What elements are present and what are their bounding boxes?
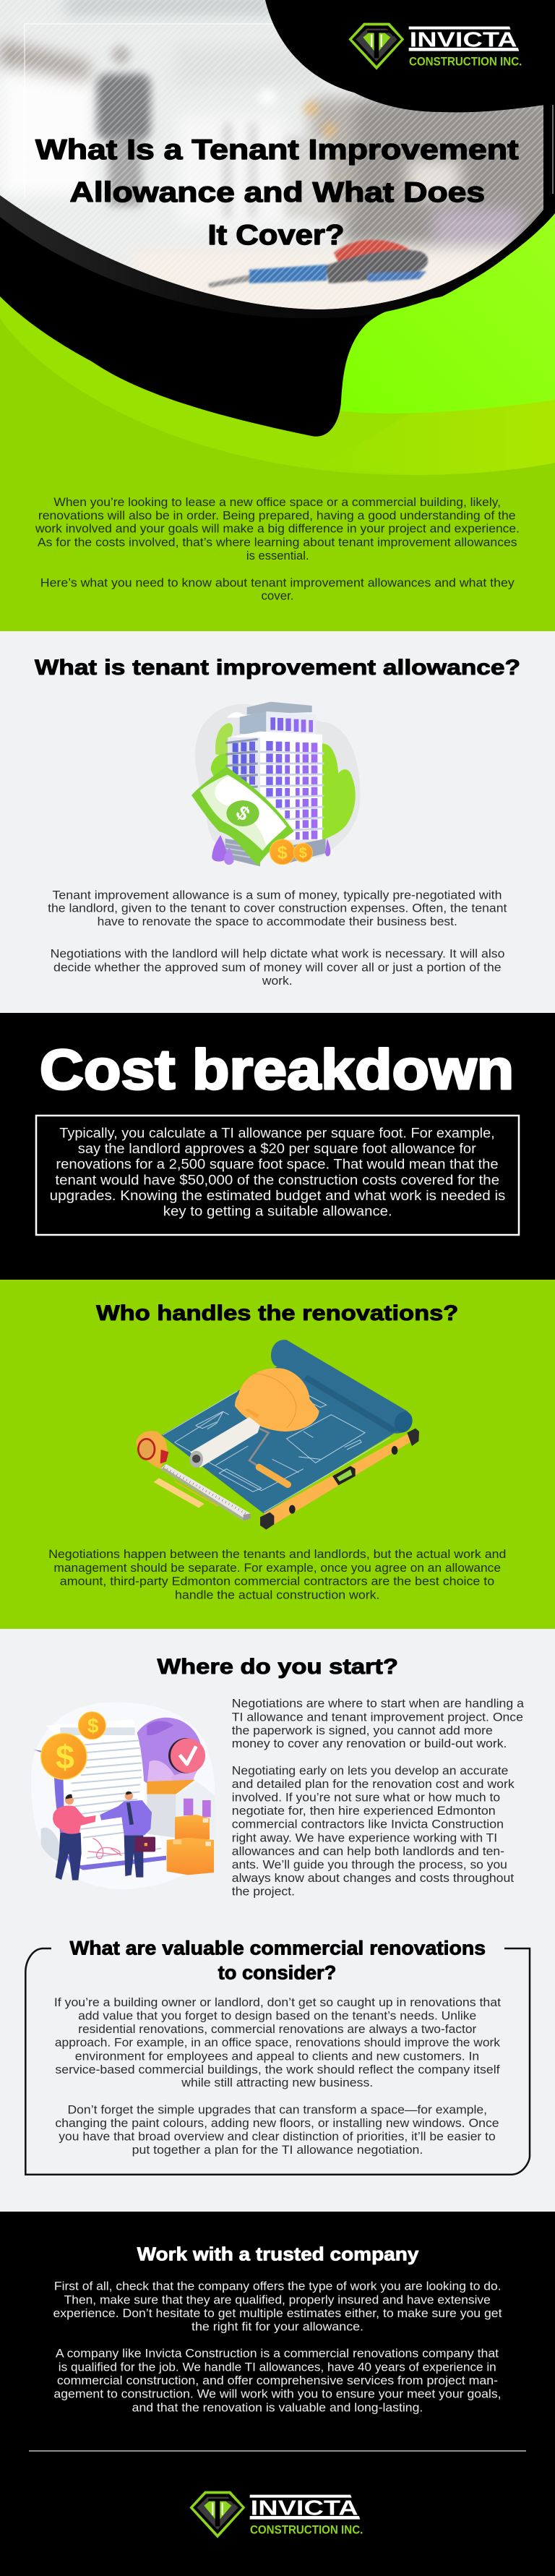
body text: you have that broad overview and clear distinction of priorities, it’ll be easier to — [59, 2131, 496, 2144]
frame — [25, 1948, 530, 2175]
body text: First of all, check that the company offers the type of work you are looking to do. — [54, 2280, 502, 2293]
callout box: renovations for a 2,500 square foot space. That would mean that the — [56, 1158, 499, 1173]
logo: Invicta Construction footer: INVICTA — [251, 2496, 358, 2520]
intro text: As for the costs involved, that’s where learning about tenant improvement allowances — [38, 536, 517, 549]
body text: the landlord, given to the tenant to cover construction expenses. Often, the tenant — [48, 902, 507, 915]
body text: while still attracting new business. — [181, 2076, 373, 2089]
body text: have to renovate the space to accommodate their business best. — [98, 915, 457, 928]
icon: large coin — [41, 1734, 87, 1779]
icon: coins: $ — [299, 846, 307, 862]
person: left — [53, 1794, 96, 1880]
illustration: signing a lease — [31, 1702, 215, 1889]
panel: hero — [0, 0, 555, 631]
hatch overlay — [0, 0, 555, 318]
body text column: the project. — [232, 1886, 295, 1899]
logo: Invicta Construction — [348, 23, 522, 70]
panel: work with a trusted company — [0, 2212, 555, 2576]
panel: what is tenant improvement allowance — [0, 631, 555, 1013]
body text column: TI allowance and tenant improvement project. Once — [232, 1711, 523, 1724]
intro text — [35, 496, 520, 602]
body text column: commercial contractors like Invicta Construction — [232, 1818, 504, 1831]
bright green wave — [340, 210, 555, 414]
heading: to consider? — [218, 1961, 336, 1983]
panel: valuable commercial renovations — [25, 1937, 530, 2175]
callout box: say the landlord approves a $20 per square foot allowance for — [78, 1142, 477, 1157]
body text column: right away. We have experience working with TI — [232, 1831, 497, 1844]
title: What Is a Tenant Improvement — [35, 134, 519, 166]
body text column: negotiate for, then hire experienced Edmonton — [232, 1805, 496, 1818]
body text: Then, make sure that they are qualified, properly insured and have extensive — [64, 2293, 491, 2306]
panel: cost breakdown — [0, 1013, 555, 1280]
body text column: allowances and can help both landlords and ten- — [232, 1845, 504, 1858]
icon: banknote: $ — [232, 801, 254, 825]
body text column: Negotiating early on lets you develop an accurate — [232, 1764, 508, 1777]
icon: paint roller — [189, 1417, 288, 1484]
icon: small coin: $ — [87, 1715, 99, 1737]
body text: changing the paint colours, adding new floors, or installing new windows. Once — [55, 2117, 499, 2130]
body text: work. — [262, 975, 293, 988]
logo: Invicta Construction footer: CONSTRUCTION INC. — [250, 2523, 363, 2537]
body text: approach. For example, in an office space, renovations should improve the work — [55, 2036, 501, 2049]
level — [260, 1429, 419, 1530]
ruler and pencil — [154, 1478, 218, 1508]
callout box: tenant would have $50,000 of the construction costs covered for the — [55, 1173, 499, 1188]
heading: Work with a trusted company — [137, 2243, 419, 2265]
logo: Invicta Construction: CONSTRUCTION INC. — [409, 55, 522, 69]
body text: amount, third-party Edmonton commercial contractors are the best choice to — [60, 1575, 494, 1588]
body text: If you’re a building owner or landlord, don’t get so caught up in renovations that — [54, 1996, 501, 2009]
callout box: upgrades. Knowing the estimated budget and what work is needed is — [50, 1189, 505, 1204]
body text: service-based commercial buildings, the work should reflect the company itself — [55, 2063, 500, 2076]
logo: Invicta Construction footer — [189, 2491, 363, 2538]
icon: banknote — [192, 766, 294, 865]
body text: decide whether the approved sum of money will cover all or just a portion of the — [53, 961, 502, 974]
icon: tape measure — [136, 1431, 251, 1520]
body text: Negotiations with the landlord will help dictate what work is necessary. It will also — [51, 947, 504, 960]
intro text: work involved and your goals will make a big difference in your project and experience. — [35, 523, 520, 536]
panel: who handles the renovations — [0, 1280, 555, 1629]
heading: What are valuable commercial renovations — [69, 1937, 486, 1959]
lime wave sector — [319, 400, 555, 475]
intro text: cover. — [262, 589, 293, 602]
green wave layer — [0, 217, 555, 475]
body text: experience. Don’t hesitate to get multiple estimates either, to make sure you get — [53, 2307, 502, 2320]
body text: Negotiations happen between the tenants and landlords, but the actual work and — [48, 1548, 506, 1561]
icon: coins — [270, 839, 312, 865]
house — [147, 1780, 215, 1838]
heading: Who handles the renovations? — [96, 1301, 458, 1325]
intro text: When you’re looking to lease a new office space or a commercial building, likely, — [53, 496, 501, 509]
building — [225, 702, 326, 866]
black corner blob — [265, 0, 555, 112]
body text column: and detailed plan for the renovation cost and work — [232, 1778, 515, 1791]
title: Allowance and What Does — [69, 177, 485, 208]
body text — [54, 1996, 501, 2157]
icon: hard hat — [235, 1368, 319, 1432]
callout box — [36, 1116, 519, 1235]
callout box: Typically, you calculate a TI allowance per square foot. For example, — [59, 1126, 495, 1141]
title: It Cover? — [208, 220, 344, 251]
title — [35, 134, 519, 251]
intro text: is essential. — [246, 549, 309, 562]
body text: add value that you forget to design based on the tenant’s needs. Unlike — [78, 2009, 476, 2022]
panel: where do you start — [0, 1629, 555, 2212]
icon: check badge — [168, 1738, 205, 1773]
body text column: the paperwork is signed, you cannot add more — [232, 1724, 493, 1737]
body text column: always know about changes and costs throughout — [232, 1872, 515, 1885]
callout box: key to getting a suitable allowance. — [163, 1204, 392, 1220]
icon: small coin — [78, 1712, 106, 1740]
body text: Tenant improvement allowance is a sum of money, typically pre-negotiated with — [52, 889, 502, 902]
black swoosh — [0, 101, 555, 437]
body text — [48, 1548, 506, 1601]
body text: Don’t forget the simple upgrades that can transform a space—for example, — [68, 2103, 487, 2116]
body text: handle the actual construction work. — [175, 1588, 380, 1601]
body text: environment for employees and appeal to clients and new customers. In — [75, 2050, 479, 2063]
body text: commercial construction, and offer comprehensive services from project man- — [57, 2374, 498, 2387]
body text: and that the renovation is valuable and long-lasting. — [132, 2401, 423, 2414]
body text — [53, 2280, 502, 2414]
body text: the right fit for your allowance. — [192, 2321, 363, 2334]
heading: What is tenant improvement allowance? — [35, 656, 520, 680]
body text: agement to construction. We will work with you to ensure your meet your goals, — [53, 2388, 502, 2401]
heading: Where do you start? — [158, 1655, 398, 1679]
body text column: involved. If you’re not sure what or how much to — [232, 1792, 500, 1805]
intro text: renovations will also be in order. Being prepared, having a good understanding of the — [38, 509, 516, 522]
icon: coins: $ — [278, 842, 288, 863]
dark band — [0, 188, 555, 318]
body text: residential renovations, commercial renovations are always a two-factor — [78, 2023, 477, 2036]
intro text: Here’s what you need to know about tenant improvement allowances and what they — [40, 576, 515, 589]
body text — [48, 889, 507, 988]
body text column: Negotiations are where to start when are handling a — [232, 1698, 525, 1711]
heading: Cost breakdown — [40, 1037, 514, 1101]
person: right — [100, 1792, 155, 1878]
logo: Invicta Construction: INVICTA — [410, 28, 517, 51]
photo: office with screwdriver — [0, 0, 555, 322]
body text: management should be separate. For example, once you agree on an allowance — [53, 1562, 501, 1575]
body text: A company like Invicta Construction is a commercial renovations company that — [56, 2348, 499, 2361]
illustration: building and money — [192, 702, 360, 866]
signature — [88, 1839, 121, 1859]
body text: is qualified for the job. We handle TI allowances, have 40 years of experience in — [59, 2361, 496, 2374]
heading — [69, 1937, 486, 1983]
body text column — [232, 1698, 525, 1899]
illustration: blueprint and tools — [136, 1340, 419, 1530]
icon: boxes — [167, 1815, 214, 1875]
body text column: money to cover any renovation or build-out work. — [232, 1737, 507, 1750]
body text column: ants. We’ll guide you through the process, so you — [232, 1859, 507, 1872]
icon: screwdriver — [208, 240, 428, 288]
body text: put together a plan for the TI allowance negotiation. — [132, 2144, 423, 2157]
icon: large coin: $ — [56, 1738, 74, 1776]
